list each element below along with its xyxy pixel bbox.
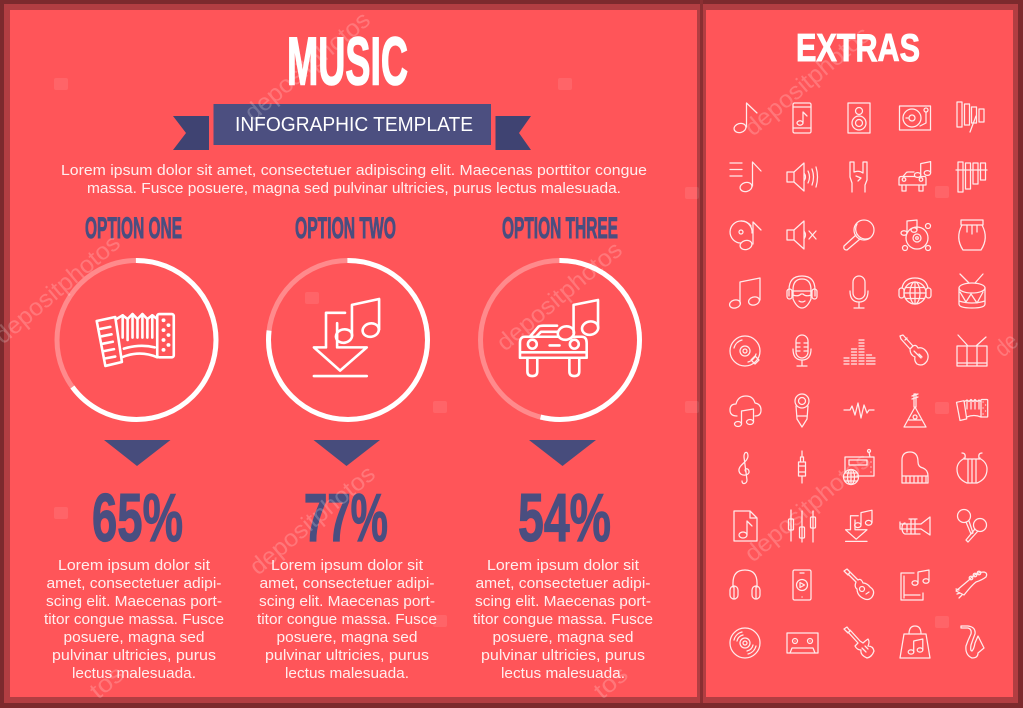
description: amet, consectetuer adipi- (476, 576, 651, 592)
description: Lorem ipsum dolor sit (487, 558, 639, 574)
watermarks: depositphotos (245, 460, 381, 581)
icon: sound wave (844, 403, 874, 418)
intro text (61, 163, 647, 197)
title: MUSIC (287, 24, 408, 100)
description: scing elit. Maecenas port- (46, 594, 222, 610)
icon: cassette (787, 633, 818, 653)
icon: treble clef (739, 452, 749, 484)
icon: file note (734, 511, 757, 541)
icon: grand piano (902, 452, 928, 483)
icon: studio mic (850, 276, 868, 308)
icon: phone play (793, 570, 811, 600)
icon grid: extras (729, 102, 988, 658)
description: titor congue massa. Fusce (257, 612, 437, 628)
icon: vinyl plug (730, 336, 760, 366)
description: Lorem ipsum dolor sit (271, 558, 423, 574)
description: Lorem ipsum dolor sit (58, 558, 210, 574)
icon: book notes (901, 570, 929, 600)
icon: note (733, 103, 757, 134)
icon: disc note (730, 221, 761, 251)
column: option three (473, 212, 653, 682)
ribbon banner: INFOGRAPHIC TEMPLATE (235, 114, 473, 136)
watermarks: depositphotos (492, 236, 628, 357)
description: titor congue massa. Fusce (473, 612, 653, 628)
description: scing elit. Maecenas port- (475, 594, 651, 610)
icon: electric guitar (844, 627, 874, 658)
description (44, 558, 224, 682)
description: scing elit. Maecenas port- (259, 594, 435, 610)
icon: rock hand (850, 162, 867, 192)
icon: conga drum (959, 220, 985, 250)
heading: option two: OPTION TWO (295, 212, 396, 245)
icon: acoustic guitar (844, 569, 874, 600)
panel: main (10, 10, 697, 697)
icon: retro mic (793, 335, 811, 366)
icon: cloud notes (730, 396, 761, 426)
column: option two (257, 212, 437, 682)
watermarks: depositphotos (740, 21, 876, 142)
description: amet, consectetuer adipi- (46, 576, 222, 592)
description (257, 558, 437, 682)
icon: dj head (787, 276, 817, 308)
description: pulvinar ultricies, purus (481, 648, 645, 664)
icon: speaker note (901, 220, 930, 250)
icon: guitar headstock (956, 571, 987, 598)
icon: speaker mute (787, 221, 816, 249)
watermarks: tos (589, 661, 633, 705)
icon: vinyl record (730, 628, 760, 658)
watermarks: tos (85, 661, 129, 705)
icon: lyre (957, 453, 987, 483)
icon: trumpet (900, 517, 930, 535)
icon: xylophone (957, 102, 984, 132)
icon: audio jack (798, 451, 806, 483)
icon: drum (959, 274, 985, 308)
icon: maracas (958, 510, 986, 542)
icon: saxophone (961, 626, 984, 658)
arrow: triangle (529, 440, 596, 466)
description: posuere, magna sed (492, 630, 634, 646)
icon: phone note (793, 103, 811, 133)
column: option one (44, 212, 224, 682)
icon: snare tv drum (957, 335, 987, 366)
description (473, 558, 653, 682)
icon: download notes (846, 510, 872, 541)
intro text: Lorem ipsum dolor sit amet, consectetuer adipiscing elit. Maecenas porttitor congue (61, 163, 647, 179)
icon: two notes (729, 278, 760, 309)
icon: violin (900, 335, 928, 365)
panel: extras (706, 10, 1013, 697)
heading: option one: OPTION ONE (85, 212, 182, 245)
arrow: triangle (104, 440, 170, 466)
description: titor congue massa. Fusce (44, 612, 224, 628)
icon: microphone (844, 220, 874, 250)
icon: note with lines (730, 162, 761, 193)
icon: accordion (97, 314, 174, 366)
watermarks: depositphotos (740, 447, 876, 568)
description: lectus malesuada. (501, 666, 625, 682)
progress ring 54% (480, 260, 640, 420)
icon: speaker sound (787, 163, 818, 191)
icon: globe headphones (899, 278, 931, 304)
icon: download music (314, 299, 380, 376)
description: posuere, magna sed (64, 630, 204, 646)
description: posuere, magna sed (276, 630, 418, 646)
watermarks: depositphotos (240, 6, 376, 127)
icon: radio globe (844, 450, 874, 484)
heading: extras: EXTRAS (796, 27, 920, 70)
icon: shopping bag music (900, 626, 930, 658)
arrow: triangle (314, 440, 380, 466)
icon: headphones (730, 570, 760, 599)
icon: marimba (956, 162, 987, 192)
icon: equalizer (844, 340, 875, 364)
description: lectus malesuada. (285, 666, 409, 682)
percentage: 77%: 77% (304, 480, 388, 556)
icon: mixer sliders (788, 510, 816, 542)
icon: turntable (900, 106, 930, 130)
icon: accordion small (956, 400, 988, 420)
ribbon banner (173, 104, 531, 150)
progress ring 77% (268, 260, 428, 420)
description: amet, consectetuer adipi- (260, 576, 435, 592)
description: pulvinar ultricies, purus (265, 648, 429, 664)
percentage: 54%: 54% (518, 480, 611, 556)
description: lectus malesuada. (72, 666, 196, 682)
icon: car with music (520, 300, 599, 376)
percentage: 65%: 65% (92, 480, 183, 556)
icon: speaker (848, 103, 870, 133)
heading: option three: OPTION THREE (502, 212, 618, 245)
icon: balalaika (904, 394, 926, 427)
icon: handheld mic (795, 394, 809, 427)
intro text: massa. Fusce posuere, magna sed pulvinar ultricies, purus lectus malesuada. (87, 181, 621, 197)
description: pulvinar ultricies, purus (52, 648, 216, 664)
progress ring 65% (57, 260, 216, 420)
icon: car with music small (899, 162, 931, 191)
